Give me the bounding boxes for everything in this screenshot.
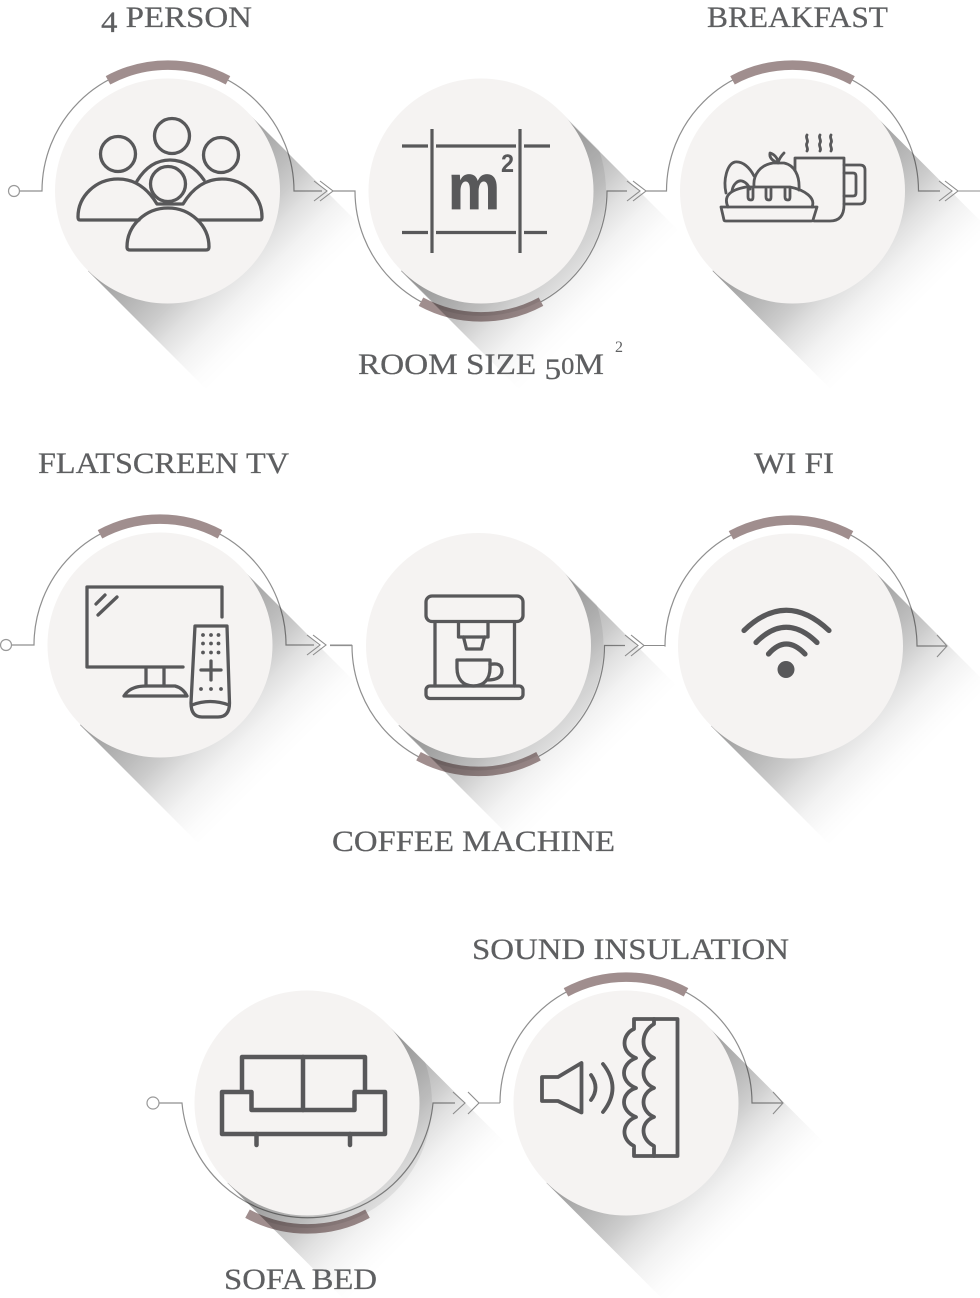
chevrons — [627, 181, 646, 201]
circle — [194, 990, 420, 1216]
label: PERSON — [117, 1, 252, 34]
chevrons — [314, 181, 333, 201]
connector line — [19, 65, 322, 191]
panel: room size — [333, 78, 694, 405]
accent arc — [418, 756, 538, 771]
panel: wi fi — [664, 447, 980, 860]
circle — [55, 78, 280, 304]
circle — [678, 534, 903, 758]
circle — [514, 990, 738, 1216]
icon: square metre: m — [448, 151, 500, 223]
circle — [366, 533, 591, 758]
connector line — [11, 519, 314, 645]
connector line — [330, 646, 625, 772]
accent arc — [100, 519, 220, 534]
label: M — [574, 348, 601, 381]
accent arc — [248, 1214, 368, 1229]
circle — [368, 78, 594, 304]
long shadow — [711, 567, 980, 860]
connector line — [333, 191, 627, 317]
connector line — [664, 520, 947, 646]
connector line — [159, 1103, 455, 1218]
label: FLATSCREEN TV — [38, 447, 289, 480]
long shadow — [88, 112, 381, 405]
arrow — [937, 635, 947, 657]
label superscript: 2 — [615, 339, 623, 356]
label: WI FI — [754, 447, 834, 480]
start node — [0, 640, 12, 650]
icon: people — [78, 118, 262, 250]
panel: flatscreen tv — [0, 447, 373, 859]
chevrons — [307, 635, 352, 655]
icon: square metre: 2 — [501, 150, 514, 178]
label: SOFA BED — [224, 1263, 377, 1296]
label: 4 — [101, 6, 117, 39]
label: SOUND INSULATION — [472, 933, 789, 966]
panel: coffee machine — [330, 533, 692, 860]
arrow — [773, 1092, 783, 1114]
long shadow — [228, 1024, 520, 1298]
label: ROOM SIZE — [358, 348, 519, 381]
accent arc — [421, 302, 541, 317]
icon: speaker and acoustic panel — [542, 1019, 678, 1156]
chevrons — [453, 1092, 500, 1114]
circle — [48, 532, 272, 758]
label: 5 — [545, 353, 561, 386]
icon: sofa — [222, 1057, 385, 1145]
icon: breakfast — [721, 135, 865, 221]
accent arc — [731, 520, 851, 535]
long shadow — [398, 566, 692, 860]
panel: sound insulation — [472, 933, 840, 1298]
long shadow — [546, 1024, 840, 1298]
panel: sofa bed — [147, 990, 520, 1298]
label: 0 — [561, 354, 574, 380]
long shadow — [80, 566, 373, 859]
accent arc — [566, 977, 686, 992]
label: BREAKFAST — [707, 1, 888, 34]
icon: coffee machine — [426, 596, 523, 698]
long shadow — [712, 112, 980, 405]
chevrons — [939, 181, 980, 201]
icon: television and remote — [87, 587, 230, 717]
accent arc — [732, 65, 852, 80]
long shadow — [401, 112, 694, 405]
connector line — [500, 977, 783, 1103]
start node — [147, 1097, 159, 1109]
icon: wifi — [744, 610, 829, 678]
connector line — [646, 65, 940, 191]
label: COFFEE MACHINE — [332, 825, 615, 858]
panel: 4 person — [8, 1, 381, 405]
start node — [8, 186, 20, 196]
panel: breakfast — [646, 1, 980, 405]
circle — [680, 78, 905, 304]
chevrons — [625, 635, 664, 656]
accent arc — [108, 65, 228, 80]
icon: square metre — [402, 129, 550, 253]
